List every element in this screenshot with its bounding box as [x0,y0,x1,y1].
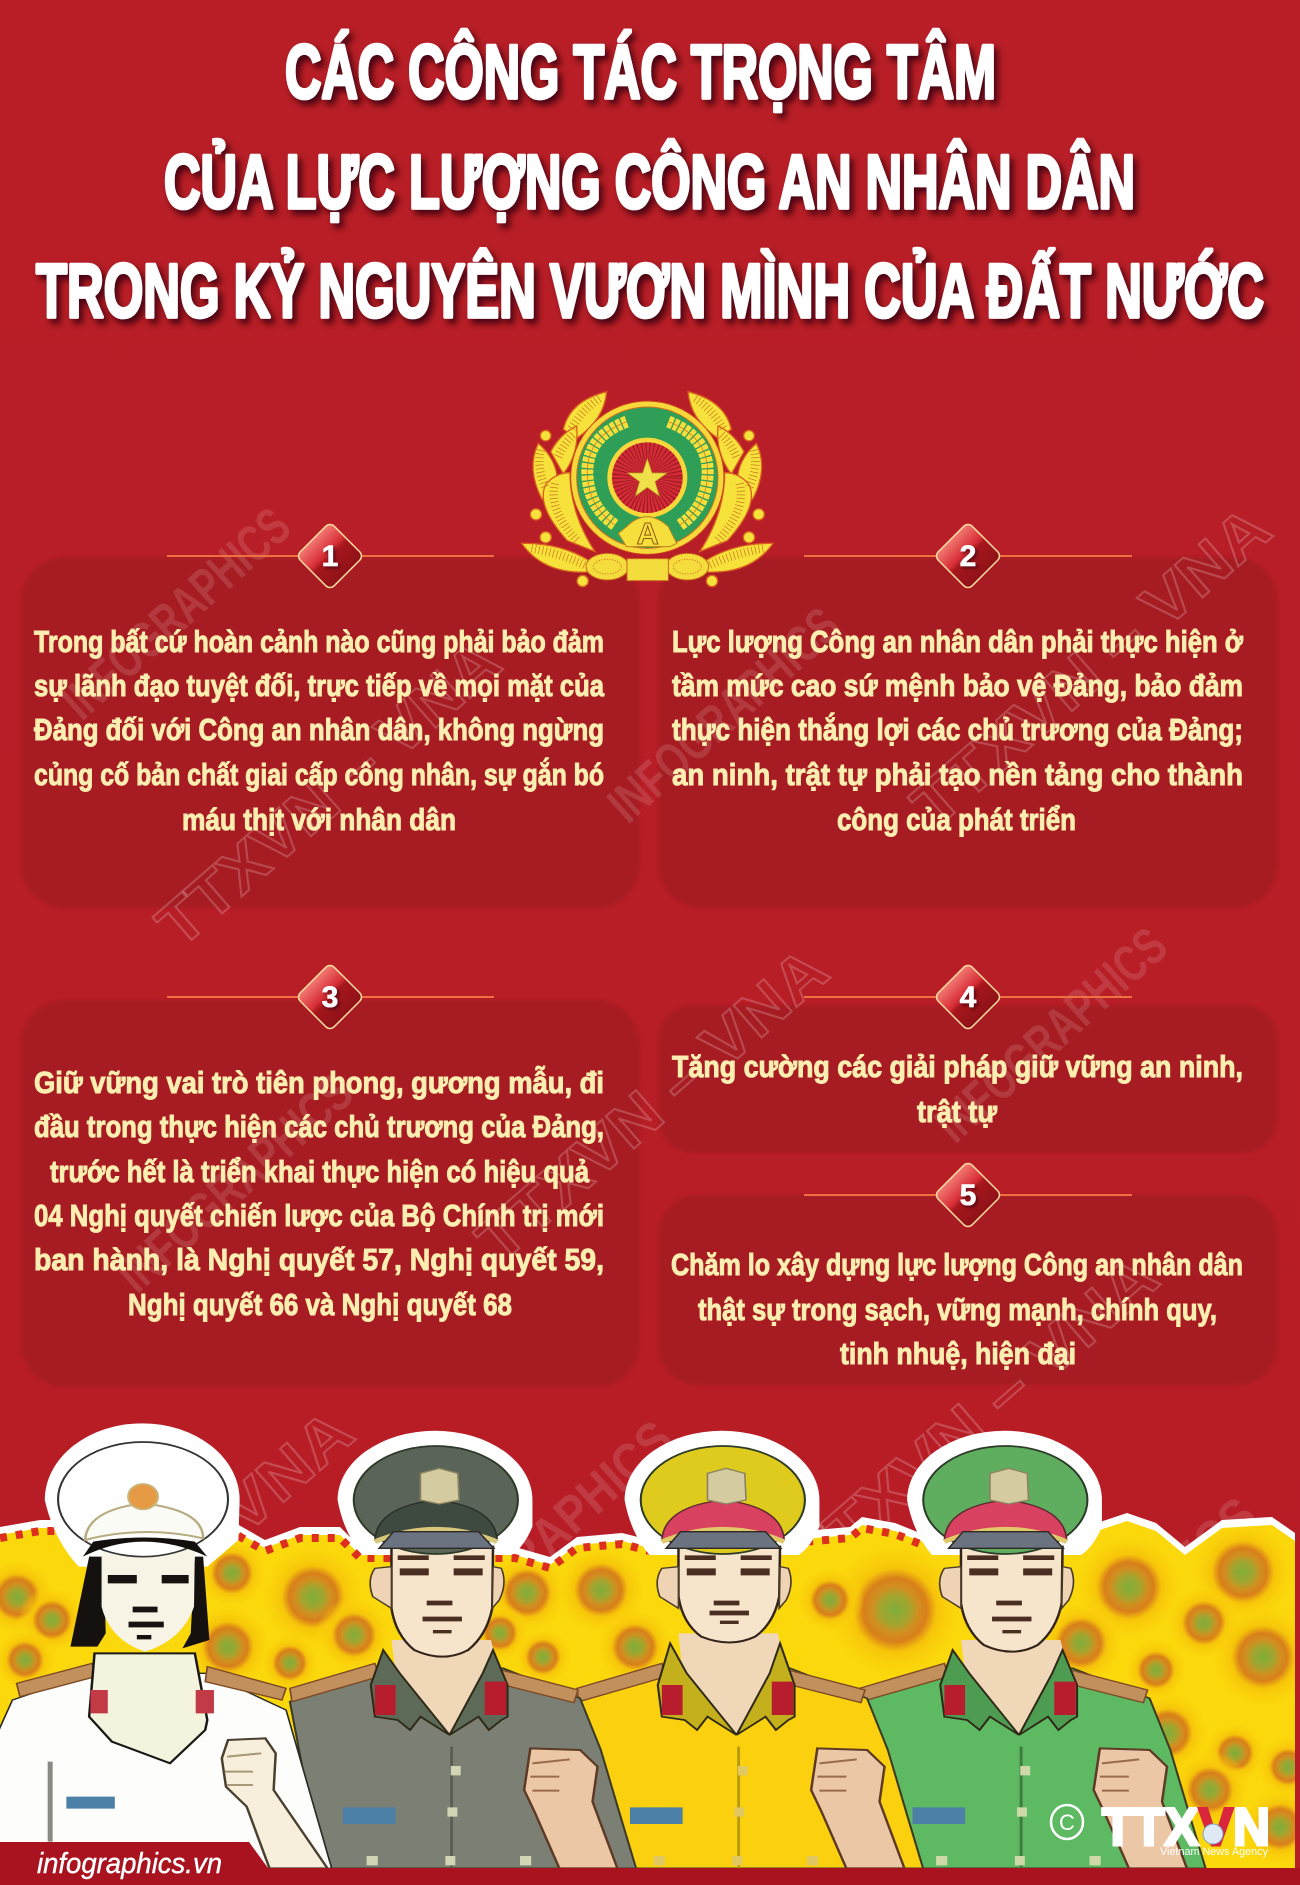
item 5 text: tinh nhuệ, hiện đại [840,1336,1076,1371]
copyright symbol: C [1059,1810,1075,1835]
number badge 2: 2 [960,540,976,573]
item 1 text: Trong bất cứ hoàn cảnh nào cũng phải bảo đảm [34,624,604,659]
neck [391,1640,499,1733]
epaulettes [17,1663,286,1700]
cap badge [420,1468,459,1504]
ears [940,1567,1074,1608]
item 3 text: Nghị quyết 66 và Nghị quyết 68 [128,1287,512,1322]
emblem laurel left hatching [532,397,602,565]
emblem ribbon [586,553,709,581]
number badge 2 [934,522,1002,590]
cap visor [949,1532,1063,1548]
copyright symbol [1051,1805,1083,1839]
epaulettes [290,1663,578,1703]
item 4 header [804,963,1132,1031]
watermarks [0,493,1284,1764]
item 3 text: Giữ vững vai trò tiên phong, gương mẫu, đi [34,1065,604,1100]
shirt [290,1667,636,1868]
watermarks: INFOGRAPHICS [106,1063,364,1304]
white cap outline [45,1423,240,1567]
panel 3 background [21,1000,640,1387]
watermarks: TTXVN – VNA [464,935,841,1276]
cap badge [707,1468,746,1504]
item 1 text [34,624,605,837]
emblem laurel right hatching [693,397,763,565]
shirt [859,1667,1206,1868]
panel 5 background [658,1195,1278,1385]
shirt [577,1667,923,1868]
watermarks: INFOGRAPHICS [389,1410,684,1684]
face [678,1547,780,1642]
officer: green uniform [859,1431,1206,1868]
cap band [662,1500,784,1540]
cap strap [944,1529,1067,1542]
agency subtitle: Vietnam News Agency [1160,1846,1268,1858]
ears [370,1567,504,1608]
number badge 5: 5 [960,1179,976,1212]
item 4 text: trật tự [917,1094,997,1129]
cap band [944,1500,1067,1540]
facial features [108,1575,189,1639]
cap band [85,1503,203,1540]
collar tabs [375,1682,506,1715]
agency globe [1203,1824,1223,1844]
item 3 text: ban hành, là Nghị quyết 57, Nghị quyết 59, [34,1242,604,1277]
name tag [66,1797,115,1809]
number badge 1: 1 [322,540,338,573]
fist [222,1738,328,1868]
cap visor [666,1532,781,1548]
emblem ring [571,401,724,554]
watermarks: INFOGRAPHICS [969,1487,1268,1764]
cap visor [379,1532,494,1548]
hair [70,1557,209,1648]
name tag and buttons [343,1807,396,1824]
item 1 header [167,522,494,590]
item 3 text [34,1065,604,1322]
epaulettes [859,1663,1148,1703]
white cap outline [907,1431,1102,1555]
collar [940,1650,1077,1735]
number badge 4: 4 [960,981,977,1014]
fist [524,1748,617,1868]
emblem gear and letters: A [637,517,659,551]
watermarks: TTXVN – VNA [144,626,514,961]
white cap outline [625,1431,819,1555]
title [36,29,1264,334]
placket [1018,1747,1025,1868]
number badge 3 [296,963,364,1031]
white cap outline [338,1431,532,1555]
emblem star [628,459,667,496]
connector line [167,555,494,557]
collar [658,1643,795,1735]
number badge 5 [934,1161,1002,1229]
white outline of flower band [0,1513,1295,1868]
collar [371,1650,508,1735]
emblem wheat [587,422,708,525]
cap strap [375,1529,497,1542]
item 2 text [672,624,1244,837]
facial features [685,1555,772,1624]
number badge 3: 3 [322,981,338,1014]
placket [735,1747,742,1868]
item 2 text: công của phát triển [837,802,1076,837]
connector line [804,996,1132,998]
watermarks: INFOGRAPHICS [51,497,302,731]
item 2 header [804,522,1132,590]
number badge 1 [296,522,364,590]
item 1 text: sự lãnh đạo tuyệt đối, trực tiếp về mọi mặt của [34,668,605,703]
item 3 text: đầu trong thực hiện các chủ trương của Đảng, [34,1109,604,1144]
fist [1094,1748,1187,1868]
neck and scarf [89,1653,207,1763]
collar tabs [662,1682,793,1715]
neck [678,1633,786,1733]
number badge 4 [934,963,1002,1031]
item 3 text: 04 Nghị quyết chiến lược của Bộ Chính trị mới [34,1198,604,1233]
watermarks: INFOGRAPHICS [924,917,1179,1154]
item 4 text [672,1049,1243,1129]
sunflower field [0,1510,1300,1870]
item 1 text: máu thịt với nhân dân [182,802,456,837]
cap visor hair line [83,1537,207,1557]
item 5 text [671,1247,1243,1371]
cap strap [662,1529,784,1542]
collar tabs [944,1682,1076,1715]
emblem laurel right [688,392,773,587]
finger lines [225,1753,261,1785]
connector line [804,1194,1132,1196]
officer: woman in white uniform [0,1423,332,1868]
footer bar with source tab [0,1842,1300,1885]
watermarks: TTXVN – VNA [899,493,1284,841]
item 1 text: Đảng đối với Công an nhân dân, không ngừng [34,712,604,747]
source label: infographics.vn [37,1848,222,1880]
item 3 header [167,963,494,1031]
item 5 header [804,1161,1132,1229]
watermarks: TTXVN – VNA [779,1242,1171,1596]
panel 2 background [658,557,1278,908]
finger lines [530,1759,570,1791]
copyright logo TTXVN [1051,1798,1270,1858]
cap dome [354,1446,518,1554]
connector line [167,996,494,998]
facial features [398,1555,485,1633]
facial features [967,1555,1054,1633]
item 2 text: an ninh, trật tự phải tạo nền tảng cho thành [672,757,1243,792]
cap badge [128,1484,158,1509]
face [961,1547,1063,1652]
collar tabs [90,1690,214,1713]
pocket line [48,1762,53,1842]
name tag and buttons [912,1807,965,1824]
epaulettes [577,1663,865,1703]
face [102,1547,195,1652]
watermarks: INFOGRAPHICS [597,597,852,834]
placket [448,1747,455,1868]
cap band [375,1500,497,1540]
item 1 text: củng cố bản chất giai cấp công nhân, sự gắn bó [34,756,604,792]
face [391,1547,493,1657]
cap dome [923,1446,1087,1554]
cap dome [641,1446,805,1554]
name tag and buttons [630,1807,683,1824]
illustration: officers with sunflowers [0,1423,1300,1870]
neck [961,1640,1069,1733]
emblem laurel left [522,392,607,587]
panel 1 background [21,557,640,908]
panel 4 background [658,1005,1278,1153]
officer: yellow uniform [577,1431,923,1868]
finger lines [817,1759,857,1791]
officer: olive uniform [290,1431,636,1868]
jagged red flower tips [0,1528,920,1568]
cap dome [58,1442,228,1557]
shirt [0,1673,332,1868]
cap badge [990,1468,1029,1504]
fist [811,1748,904,1868]
connector line [804,555,1132,557]
icon: police emblem [522,392,773,587]
finger lines [1100,1759,1139,1791]
item 3 text: trước hết là triển khai thực hiện có hiệu quả [50,1154,590,1189]
agency wordmark: TTXVN [1102,1798,1270,1857]
emblem gear and letters [618,517,677,551]
ears [657,1567,791,1608]
